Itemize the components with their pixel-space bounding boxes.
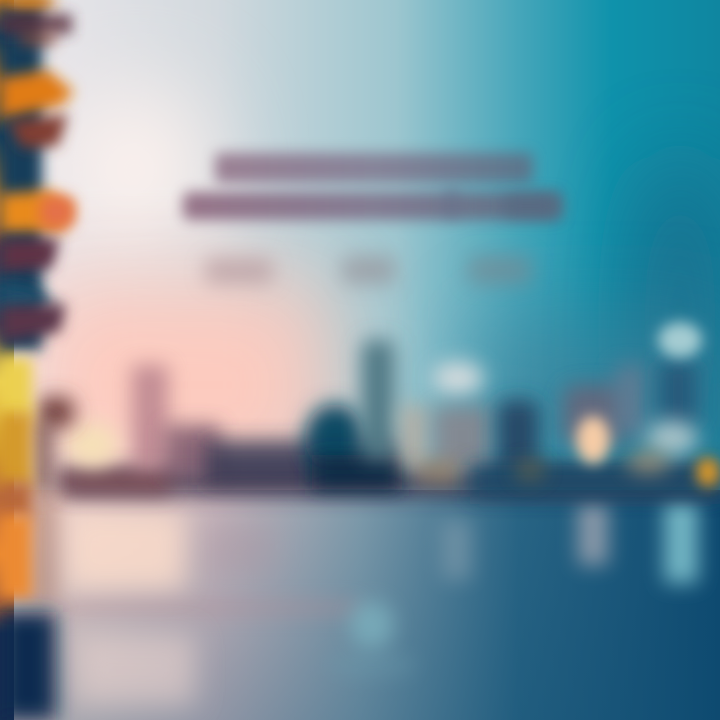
skyline silhouette	[28, 322, 720, 605]
water reflection	[0, 490, 720, 720]
foreground pillar with orange bands	[0, 0, 74, 720]
blurred stat labels	[205, 256, 532, 284]
blurred title	[183, 153, 563, 220]
background sky	[0, 0, 720, 500]
